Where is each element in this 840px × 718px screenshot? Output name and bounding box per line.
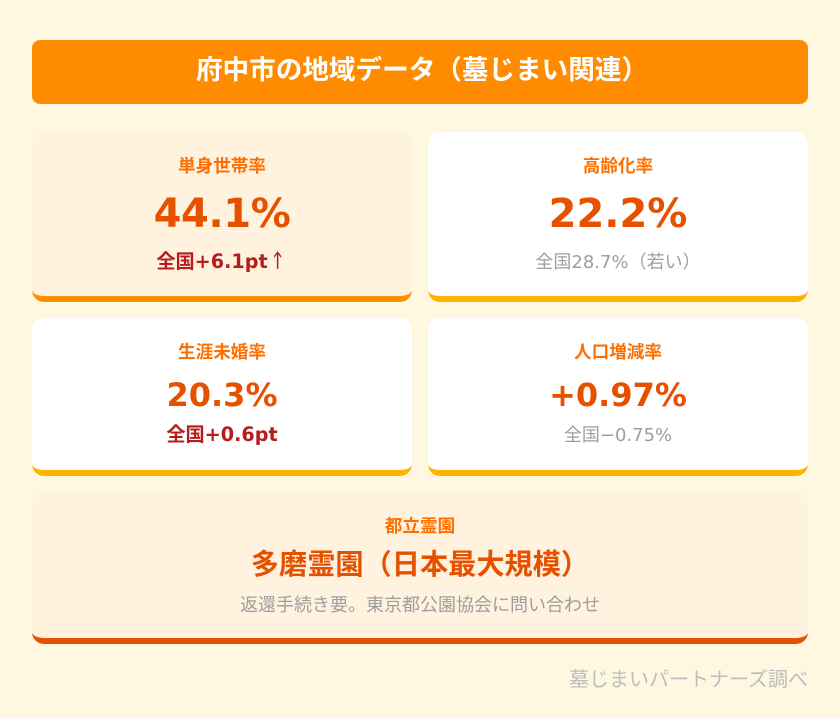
- label: 都立霊園: [385, 517, 455, 537]
- panel: metropolitan cemetery: [32, 492, 808, 644]
- label: 単身世帯率: [178, 157, 266, 177]
- label: 生涯未婚率: [178, 343, 266, 363]
- panel: lifetime unmarried rate: [32, 318, 412, 476]
- panel: population change rate: [428, 318, 808, 476]
- value: 20.3%: [166, 376, 278, 414]
- title: 府中市の地域データ（墓じまい関連）: [196, 55, 648, 86]
- comparison: 全国+6.1pt↑: [156, 250, 288, 273]
- label: 人口増減率: [574, 343, 662, 363]
- comparison: 全国+0.6pt: [166, 423, 278, 446]
- comparison: 全国−0.75%: [564, 425, 672, 446]
- panel: single-household rate: [32, 132, 412, 302]
- footer source: 墓じまいパートナーズ調べ: [569, 667, 808, 691]
- note: 返還手続き要。東京都公園協会に問い合わせ: [240, 595, 600, 616]
- cemetery name: 多磨霊園（日本最大規模）: [251, 548, 589, 581]
- title bar: [32, 40, 808, 104]
- value: 22.2%: [549, 191, 687, 237]
- comparison: 全国28.7%（若い）: [535, 252, 701, 273]
- value: 44.1%: [154, 191, 290, 237]
- label: 高齢化率: [583, 157, 653, 177]
- value: +0.97%: [549, 376, 687, 414]
- panel: aging rate: [428, 132, 808, 302]
